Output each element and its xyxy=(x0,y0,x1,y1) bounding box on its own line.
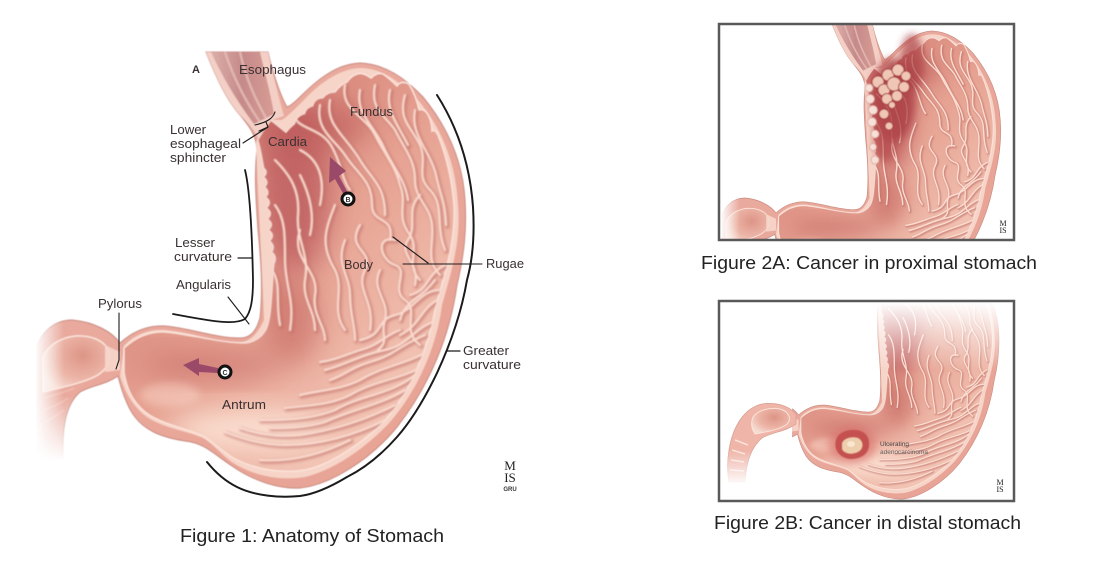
monogram xyxy=(996,478,1004,494)
illustrator monogram: IS xyxy=(504,470,516,485)
caption: figure 1: Figure 1: Anatomy of Stomach xyxy=(180,525,444,546)
monogram: M xyxy=(999,219,1007,228)
tumor in proximal stomach xyxy=(865,34,924,164)
labels: Fundus xyxy=(350,104,393,119)
arrow C xyxy=(183,358,231,378)
label: ulcerating adenocarcinoma: adenocarcinoma xyxy=(880,449,928,456)
labels: Lesser xyxy=(175,235,216,250)
labels: A xyxy=(192,64,200,76)
illustration: stomach cross-section xyxy=(36,52,466,488)
illustrator monogram: M xyxy=(504,458,516,473)
monogram: IS xyxy=(996,485,1004,494)
labels: curvature xyxy=(463,357,521,372)
label: ulcerating adenocarcinoma xyxy=(880,442,928,454)
label: ulcerating adenocarcinoma: Ulcerating xyxy=(880,441,909,448)
labels: Pylorus xyxy=(98,296,142,311)
panel: figure 2B cancer in distal stomach xyxy=(718,300,1016,502)
caption: figure 2A: Figure 2A: Cancer in proximal stomach xyxy=(701,252,1037,273)
labels: Cardia xyxy=(268,134,308,149)
labels xyxy=(98,62,524,412)
duodenum curving downward xyxy=(722,403,796,486)
labels: sphincter xyxy=(170,150,227,165)
monogram: IS xyxy=(999,226,1007,235)
monogram xyxy=(999,219,1007,235)
labels: Lower xyxy=(170,122,207,137)
figure 1: stomach anatomy diagram xyxy=(36,52,524,497)
labels: Angularis xyxy=(176,277,232,292)
arrow B xyxy=(329,157,354,205)
illustrator monogram xyxy=(503,458,517,493)
caption: figure 2B: Figure 2B: Cancer in distal stomach xyxy=(714,512,1021,533)
labels: curvature xyxy=(174,249,232,264)
illustrator monogram: GRU xyxy=(503,487,517,493)
tumor: ulcerating adenocarcinoma xyxy=(828,426,876,464)
panel: figure 2A cancer in proximal stomach xyxy=(718,22,1016,242)
arrow B: B xyxy=(345,197,351,204)
arrow C: C xyxy=(222,370,228,377)
labels: Greater xyxy=(463,343,510,358)
labels: Antrum xyxy=(222,397,266,412)
labels: Rugae xyxy=(486,256,524,271)
labels: esophageal xyxy=(170,136,241,151)
leader lines and curvature outlines xyxy=(116,95,482,497)
monogram: M xyxy=(996,478,1004,487)
labels: Esophagus xyxy=(239,62,307,77)
labels: Body xyxy=(344,257,373,272)
